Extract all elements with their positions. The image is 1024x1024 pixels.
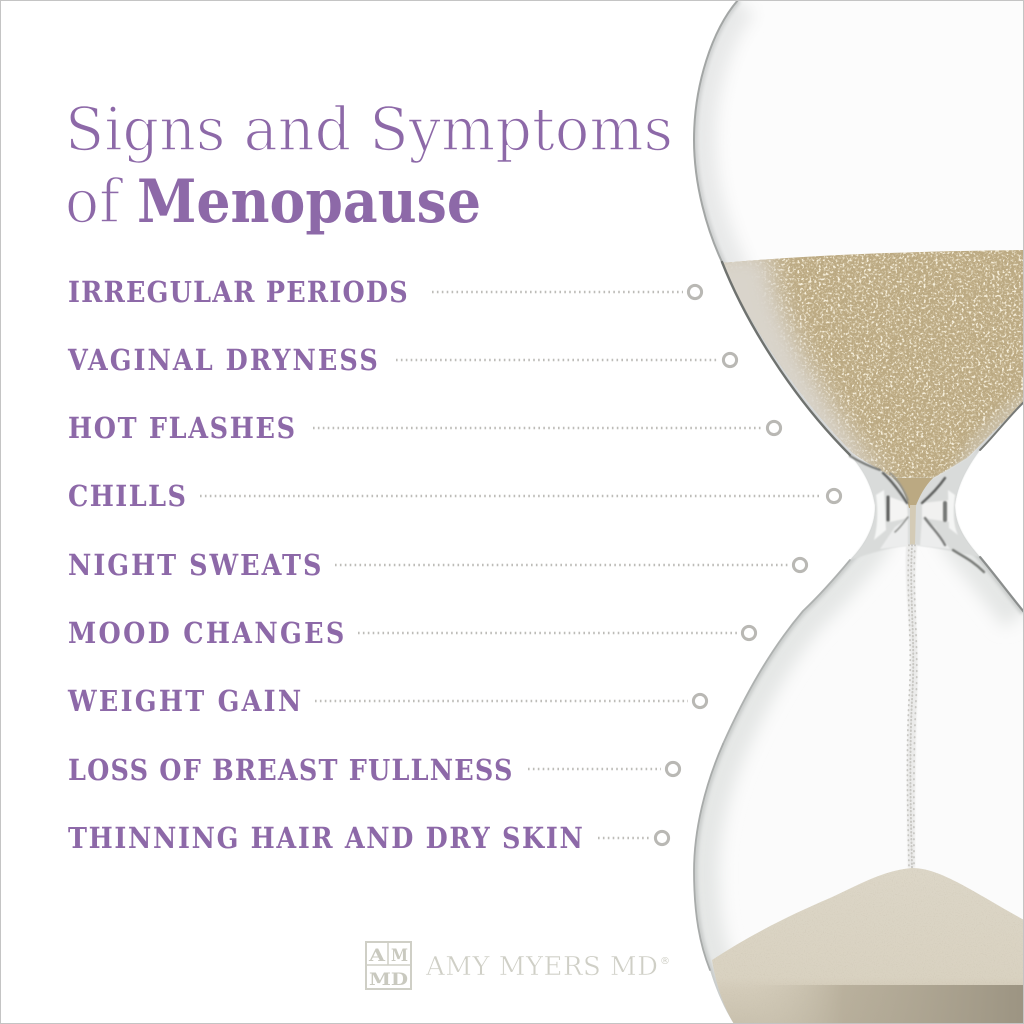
symptom: night sweats: NIGHT SWEATS — [68, 548, 321, 582]
symptom: vaginal dryness: VAGINAL DRYNESS — [67, 343, 378, 377]
symptom: hot flashes: HOT FLASHES — [68, 411, 295, 445]
symptom: mood changes — [68, 616, 756, 650]
sand sparkle — [724, 250, 1023, 478]
registered mark: ® — [660, 956, 670, 967]
symptom: chills: CHILLS — [68, 479, 186, 513]
symptom: chills — [68, 479, 841, 513]
symptom list — [67, 275, 841, 855]
symptom: vaginal dryness — [67, 343, 737, 377]
upper glass bulb — [690, 0, 1024, 510]
sand shadow band — [745, 985, 1024, 1024]
symptom: irregular periods: IRREGULAR PERIODS — [68, 275, 408, 309]
logo wordmark: AMY MYERS MD — [425, 952, 658, 982]
neck windows — [874, 490, 958, 549]
symptom: irregular periods — [68, 275, 702, 309]
neck sand funnel — [893, 478, 933, 508]
upper sand — [724, 250, 1023, 478]
symptom: loss of breast fullness: LOSS OF BREAST FULLNESS — [68, 753, 512, 787]
logo mark: M — [391, 946, 408, 966]
glass neck — [850, 450, 984, 572]
lower glass bulb — [690, 505, 1024, 1024]
title line 2: of — [65, 167, 124, 237]
hourglass illustration — [690, 0, 1024, 1024]
lower sand pile — [712, 868, 1024, 1024]
logo mark: A — [368, 946, 386, 966]
glass outline — [694, 0, 1024, 970]
falling sand stream — [906, 505, 918, 868]
logo — [366, 942, 670, 990]
neck dark reflections — [850, 456, 984, 572]
logo mark — [366, 942, 411, 990]
logo mark: MD — [369, 970, 408, 990]
symptom: hot flashes — [68, 411, 781, 445]
symptom: thinning hair and dry skin: THINNING HAIR AND DRY SKIN — [68, 821, 583, 855]
symptom: weight gain — [67, 684, 707, 718]
symptom: weight gain: WEIGHT GAIN — [67, 684, 301, 718]
title — [65, 95, 673, 237]
title bold word: Menopause — [137, 167, 481, 237]
symptom: night sweats — [68, 548, 807, 582]
title line 1: Signs and Symptoms — [65, 95, 673, 165]
symptom: mood changes: MOOD CHANGES — [68, 616, 344, 650]
